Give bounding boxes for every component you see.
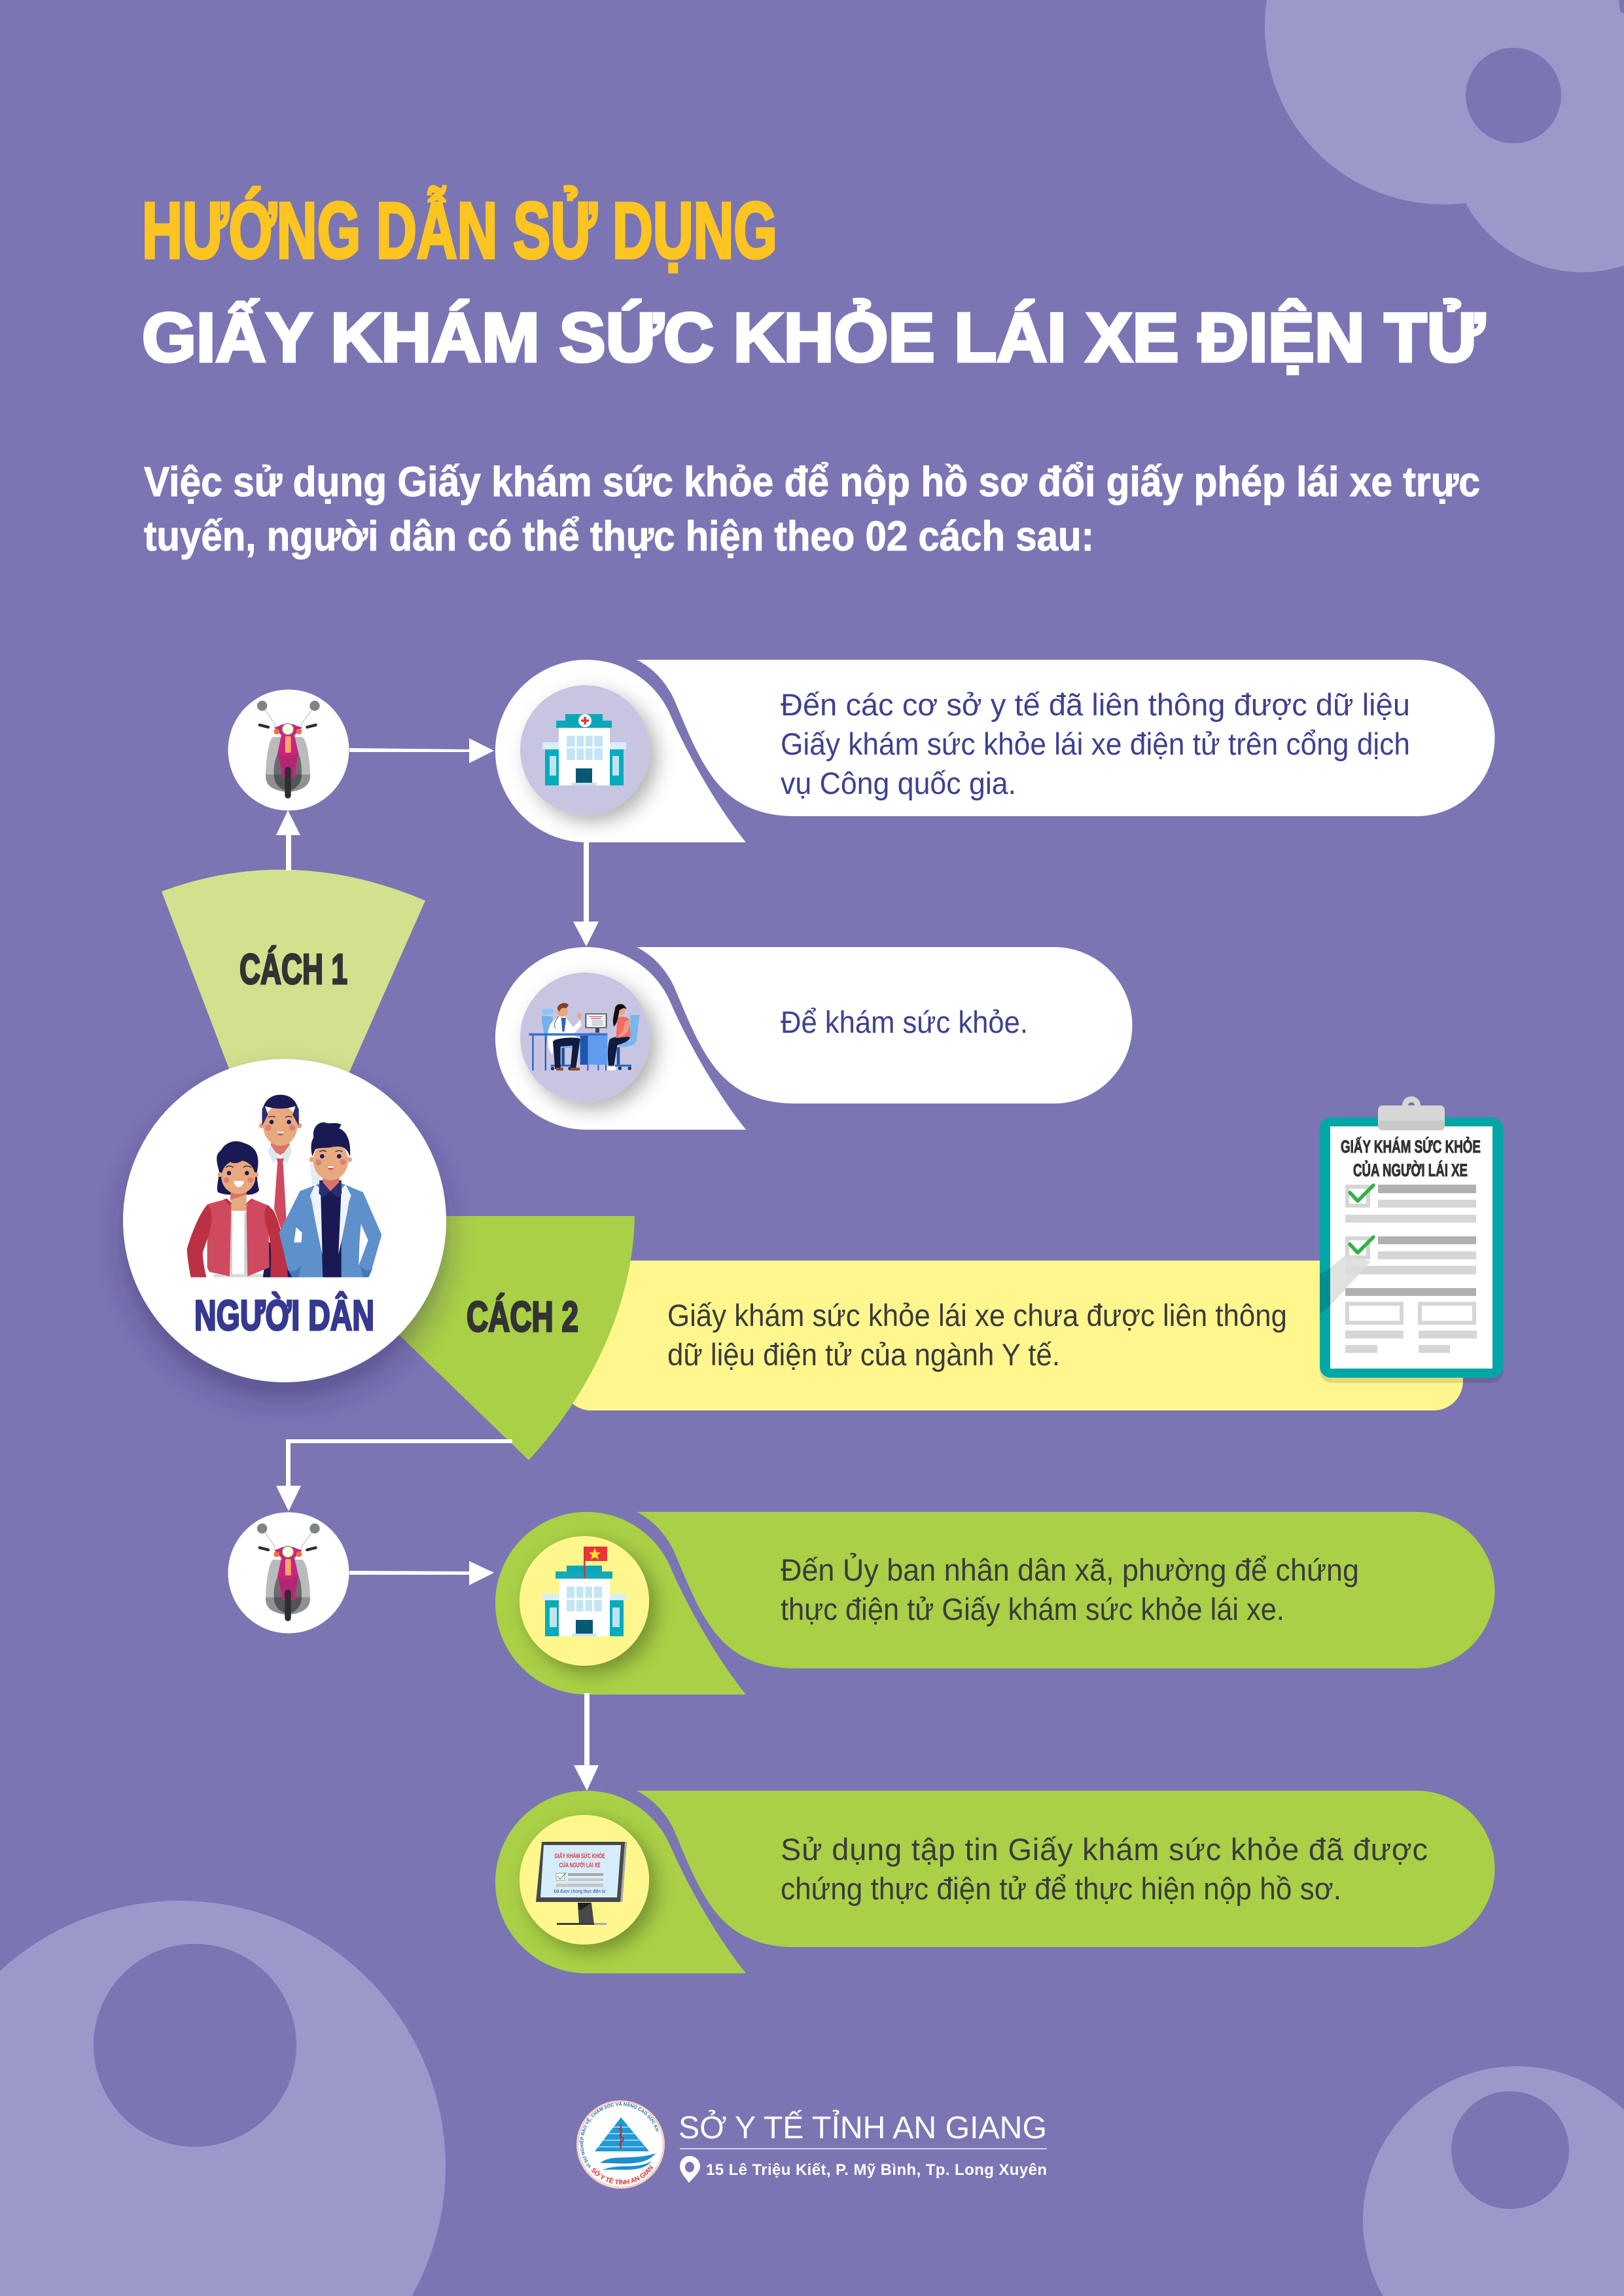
icon: scooter 1 — [228, 690, 349, 810]
label: người dân: NGƯỜI DÂN — [194, 1291, 374, 1339]
text: cách 2 step 1 — [781, 1552, 1359, 1626]
icon: computer monitor with certificate: CỦA NGƯỜI LÁI XE — [559, 1861, 601, 1869]
panel: cách 1 step 2 teardrop — [495, 947, 746, 1130]
footer logo: VÌ SỰ NGHIỆP BẢO VỆ, CHĂM SÓC VÀ NÂNG CAO SỨC KHỎE NHÂN DÂN — [579, 2102, 660, 2168]
icon: clipboard document — [1320, 1096, 1503, 1383]
intro paragraph — [144, 458, 1480, 560]
decorative circles bottom right — [1363, 2066, 1624, 2296]
intro paragraph: tuyến, người dân có thể thực hiện theo 02 cách sau: — [144, 512, 1094, 560]
icon: scooter 2 — [228, 1512, 349, 1634]
decorative circles bottom left — [0, 1901, 446, 2296]
icon: computer monitor with certificate — [520, 1815, 649, 1945]
text: cách 2 step 2: chứng thực điện tử để thực hiện nộp hồ sơ. — [781, 1871, 1341, 1906]
icon: government building — [520, 1536, 649, 1666]
footer divider — [680, 2148, 1047, 2149]
panel: cách 1 step 1 teardrop — [495, 660, 746, 842]
text: step 1: Đến các cơ sở y tế đã liên thông được dữ liệu — [781, 687, 1410, 722]
illustration: three people — [187, 1095, 381, 1278]
panel: cách 1 step 2 pill — [637, 947, 1132, 1103]
title line 2: GIẤY KHÁM SỨC KHỎE LÁI XE ĐIỆN TỬ — [142, 298, 1485, 376]
panel: cách 2 shape — [393, 1216, 635, 1460]
arrow: scooter to people's committee — [349, 1561, 494, 1585]
panel: cách 2 step 1 pill — [637, 1512, 1494, 1668]
text: cách 2 description: Giấy khám sức khỏe lái xe chưa được liên thông — [667, 1298, 1287, 1333]
arrow: cách 2 to scooter — [276, 1439, 512, 1511]
footer organisation name: SỞ Y TẾ TỈNH AN GIANG — [679, 2109, 1047, 2145]
label: cách 1: CÁCH 1 — [239, 945, 347, 993]
panel: cách 2 step 1 teardrop — [495, 1512, 746, 1695]
clipboard heading — [1341, 1136, 1481, 1180]
icon: location pin — [680, 2156, 700, 2183]
text: step 2: Để khám sức khỏe. — [781, 1005, 1028, 1039]
panel: cách 2 step 2 teardrop — [495, 1791, 746, 1973]
text: cách 2 step 1: Đến Ủy ban nhân dân xã, phường để chứng — [781, 1552, 1359, 1587]
intro paragraph: Việc sử dụng Giấy khám sức khỏe để nộp hồ sơ đổi giấy phép lái xe trực — [144, 458, 1480, 505]
arrow: scooter to hospital — [349, 738, 494, 763]
arrow: cách 1 to scooter — [276, 810, 300, 870]
text: step 1: vụ Công quốc gia. — [781, 766, 1016, 800]
clipboard heading: GIẤY KHÁM SỨC KHỎE — [1341, 1136, 1481, 1157]
clipboard heading: CỦA NGƯỜI LÁI XE — [1353, 1159, 1468, 1180]
title line 1: HƯỚNG DẪN SỬ DỤNG — [142, 185, 777, 275]
decorative circles top right — [1265, 0, 1624, 272]
footer address: 15 Lê Triệu Kiết, P. Mỹ Bình, Tp. Long Xuyên — [706, 2161, 1047, 2179]
text: cách 2 description: dữ liệu điện tử của ngành Y tế. — [667, 1337, 1060, 1372]
arrow: committee to file — [574, 1693, 599, 1791]
arrow: hospital to doctor — [573, 842, 599, 946]
label: cách 2: CÁCH 2 — [467, 1293, 578, 1340]
icon: doctor and patient — [520, 973, 650, 1102]
panel: cách 1 step 1 pill — [637, 660, 1494, 816]
icon: computer monitor with certificate: Đã được chứng thực điện tử — [554, 1889, 606, 1894]
panel: cách 2 yellow bar — [556, 1261, 1463, 1410]
footer logo: SỞ Y TẾ TỈNH AN GIANG — [591, 2165, 653, 2185]
text: cách 2 description — [667, 1298, 1287, 1372]
text: cách 2 step 2 — [781, 1832, 1428, 1906]
panel: cách 1 fan — [162, 870, 425, 1217]
icon: hospital — [520, 685, 650, 815]
icon: computer monitor with certificate: GIẤY KHÁM SỨC KHỎE — [555, 1852, 605, 1860]
text: step 1 — [781, 687, 1410, 800]
panel: người dân circle — [123, 1059, 446, 1382]
text: cách 2 step 2: Sử dụng tập tin Giấy khám sức khỏe đã được — [781, 1832, 1428, 1867]
footer logo — [576, 2100, 665, 2189]
text: step 1: Giấy khám sức khỏe lái xe điện tử trên cổng dịch — [781, 726, 1410, 761]
panel: cách 2 step 2 pill — [637, 1791, 1494, 1947]
text: cách 2 step 1: thực điện tử Giấy khám sức khỏe lái xe. — [781, 1592, 1284, 1626]
